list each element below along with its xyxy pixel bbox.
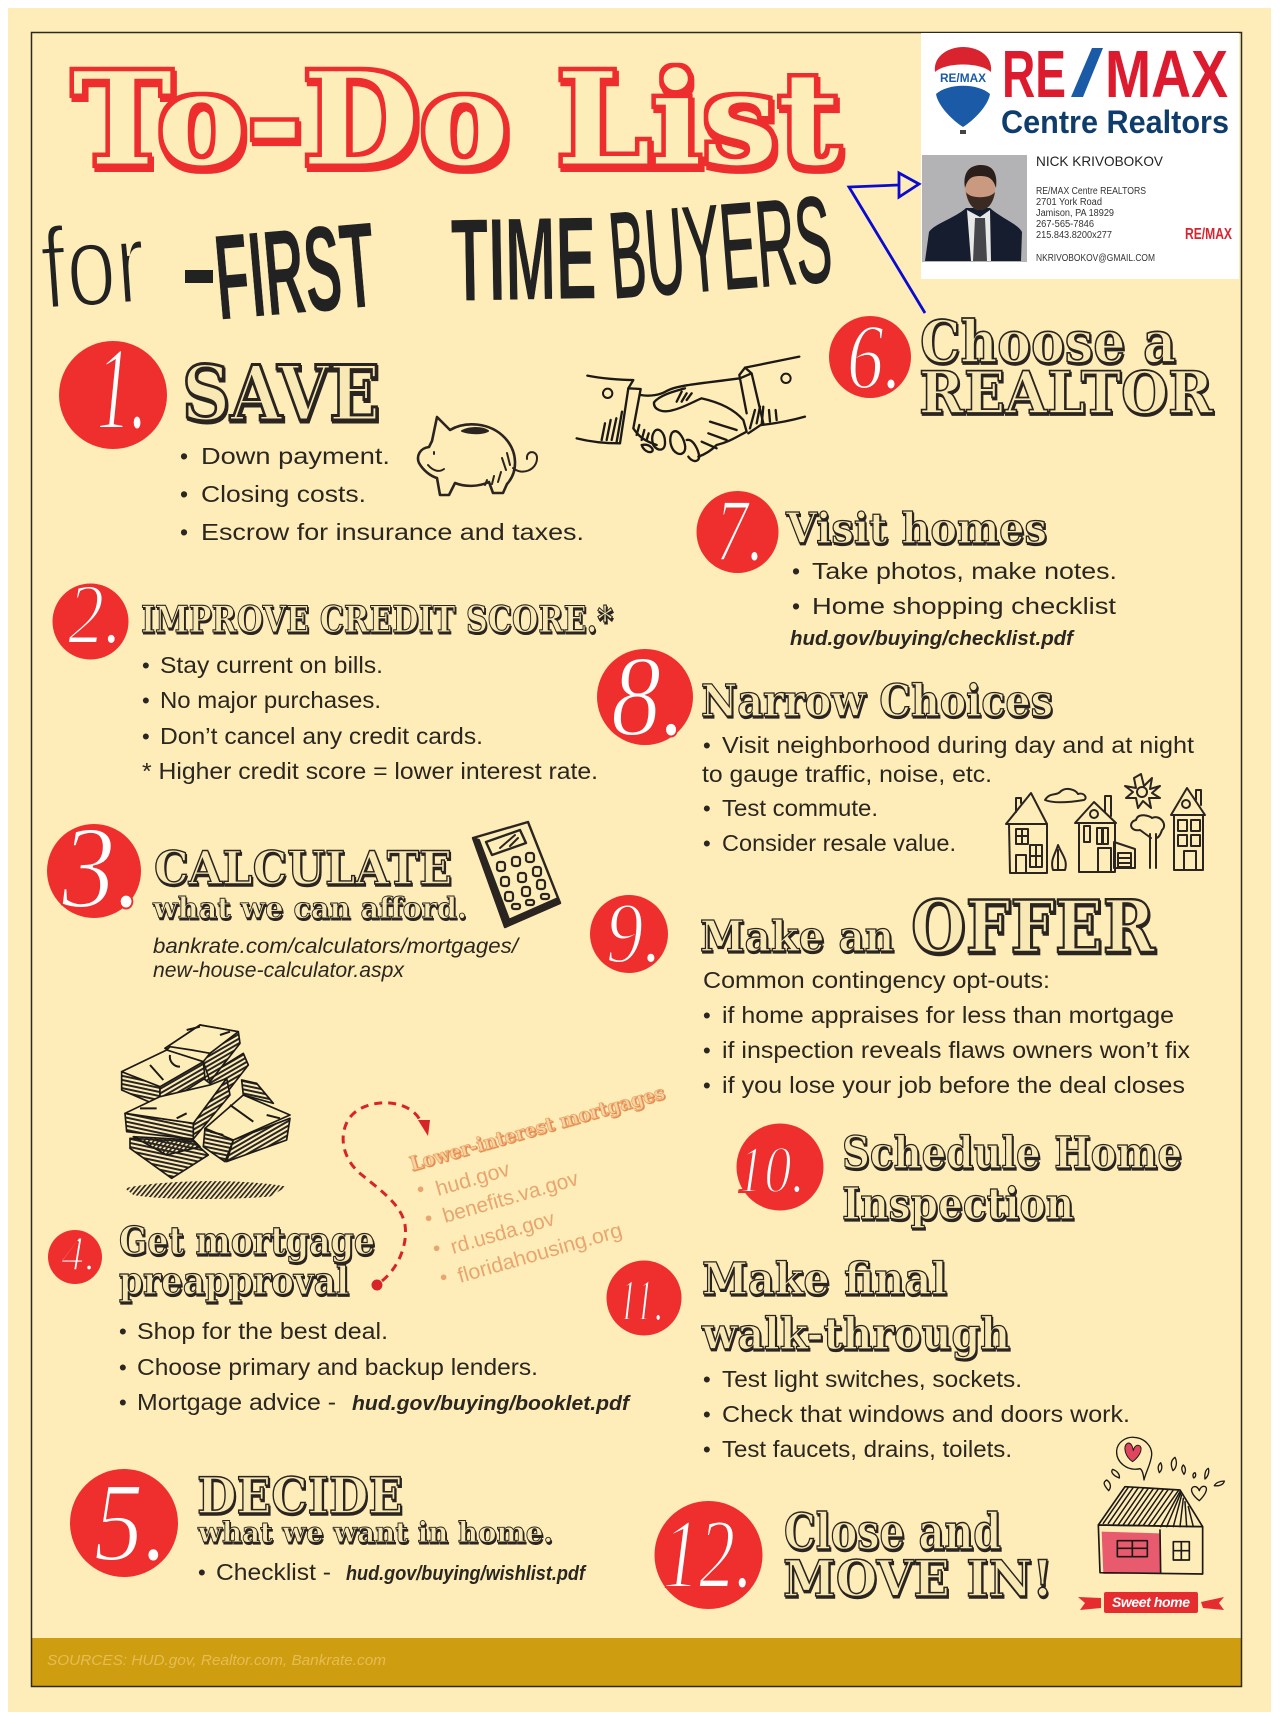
step 11 number bbox=[606, 1260, 682, 1336]
step 1 bullets: Escrow for insurance and taxes. bbox=[201, 519, 584, 545]
step 3 link: bankrate.com/calculators/mortgages/ bbox=[153, 935, 520, 958]
step 5 checklist: Checklist - bbox=[216, 1559, 331, 1585]
step 4 bullets: • bbox=[119, 1319, 127, 1344]
step 5 heading: DECIDE bbox=[197, 1466, 403, 1525]
step 7 bullets: Home shopping checklist bbox=[812, 593, 1117, 619]
step 7 bullets: hud.gov/buying/checklist.pdf bbox=[790, 628, 1075, 650]
step 6 number: 6. bbox=[847, 306, 902, 409]
footer band: SOURCES: HUD.gov, Realtor.com, Bankrate.com bbox=[47, 1652, 386, 1669]
step 9 bullets: • bbox=[703, 1038, 711, 1063]
step 4 aside: lower-interest mortgages: hud.gov bbox=[433, 1158, 513, 1201]
step 11 heading: walk-through bbox=[701, 1309, 1010, 1360]
icon: calculator bbox=[473, 822, 560, 927]
footer band bbox=[32, 1638, 1242, 1686]
step 2 bullets: • bbox=[142, 724, 150, 749]
step 11 bullets: Test light switches, sockets. bbox=[722, 1366, 1022, 1392]
step 3 subheading: what we can afford. bbox=[152, 891, 467, 925]
step 8 bullets: • bbox=[703, 831, 711, 856]
step 1 number bbox=[59, 323, 167, 454]
step 3 link bbox=[153, 935, 520, 982]
title: To-Do List bbox=[72, 45, 840, 195]
step 11 bullets: Check that windows and doors work. bbox=[722, 1401, 1130, 1427]
step 4 aside: lower-interest mortgages: • bbox=[437, 1266, 450, 1290]
step 5 checklist: • bbox=[198, 1560, 206, 1585]
icon: money stacks bbox=[122, 1025, 290, 1199]
step 11 bullets: Test faucets, drains, toilets. bbox=[722, 1436, 1012, 1462]
step 2 bullets: * Higher credit score = lower interest rate. bbox=[142, 758, 598, 784]
agent contact details: 267-565-7846 bbox=[1036, 219, 1094, 230]
step 2 bullets: Don’t cancel any credit cards. bbox=[160, 723, 483, 749]
step 8 bullets: • bbox=[703, 733, 711, 758]
icon: balloon logo: RE/MAX bbox=[940, 71, 986, 85]
step 3 link: new-house-calculator.aspx bbox=[153, 959, 405, 982]
step 5 number: 5. bbox=[94, 1461, 168, 1585]
logo wordmark: Centre Realtors bbox=[1001, 104, 1229, 140]
step 9 bullets: • bbox=[703, 1073, 711, 1098]
step 1 bullets bbox=[180, 443, 584, 545]
agent contact details: Jamison, PA 18929 bbox=[1036, 208, 1114, 219]
step 1 bullets: • bbox=[180, 481, 188, 507]
step 1 number: 1. bbox=[97, 323, 147, 454]
step 5 subheading: what we want in home. bbox=[197, 1516, 553, 1549]
step 4 bullets bbox=[119, 1318, 631, 1415]
step 8 number: 8. bbox=[611, 633, 686, 760]
step 1 heading: SAVE bbox=[182, 349, 380, 438]
step 11 bullets: • bbox=[703, 1367, 711, 1392]
step 12 heading: Close and bbox=[784, 1502, 1001, 1561]
agent contact details: 2701 York Road bbox=[1036, 197, 1102, 208]
step 12 heading: MOVE IN! bbox=[783, 1549, 1053, 1608]
agent contact details: NICK KRIVOBOKOV bbox=[1036, 153, 1164, 169]
step 9 bullets bbox=[703, 967, 1191, 1098]
logo wordmark: MAX bbox=[1105, 37, 1228, 112]
icon: houses bbox=[1006, 774, 1205, 873]
step 8 bullets: Consider resale value. bbox=[722, 830, 956, 856]
step 4 aside: lower-interest mortgages: rd.usda.gov bbox=[448, 1207, 558, 1259]
step 12 heading bbox=[783, 1502, 1053, 1608]
step 9 number: 9. bbox=[606, 884, 662, 981]
step 2 bullets: No major purchases. bbox=[160, 687, 381, 713]
step 12 number: 12. bbox=[663, 1500, 753, 1609]
step 6 heading: Choose a bbox=[920, 308, 1176, 376]
step 9 heading: OFFER bbox=[911, 884, 1156, 969]
agent contact details: RE/MAX bbox=[1185, 226, 1232, 243]
text: BUYERS bbox=[604, 171, 836, 324]
agent photo bbox=[922, 155, 1027, 262]
step 4 aside: lower-interest mortgages: Lower-interest mortgages bbox=[407, 1080, 667, 1176]
subtitle: TIME bbox=[450, 192, 597, 327]
step 2 bullets: • bbox=[142, 688, 150, 713]
logo wordmark bbox=[1001, 37, 1229, 140]
step 4 bullets: hud.gov/buying/booklet.pdf bbox=[352, 1393, 631, 1415]
step 3 number: 3. bbox=[61, 802, 142, 933]
step 10 heading bbox=[842, 1128, 1182, 1230]
step 9 bullets: if home appraises for less than mortgage bbox=[722, 1002, 1174, 1028]
step 4 number: 4. bbox=[61, 1225, 96, 1281]
icon: handshake bbox=[577, 357, 805, 461]
ribbon: sweet home: Sweet home bbox=[1112, 1594, 1190, 1610]
agent contact details: NKRIVOBOKOV@GMAIL.COM bbox=[1036, 253, 1155, 264]
subtitle: FIRST bbox=[209, 196, 381, 346]
step 2 heading: IMPROVE CREDIT SCORE.* bbox=[141, 599, 613, 641]
ribbon: sweet home bbox=[1078, 1592, 1224, 1613]
step 5 checklist bbox=[198, 1559, 587, 1585]
step 8 bullets: to gauge traffic, noise, etc. bbox=[702, 761, 992, 787]
step 10 heading: Schedule Home bbox=[842, 1128, 1182, 1179]
step 4 number bbox=[48, 1225, 102, 1284]
step 7 bullets: Take photos, make notes. bbox=[812, 558, 1117, 584]
step 4 aside: lower-interest mortgages: • bbox=[430, 1237, 443, 1261]
step 4 bullets: Shop for the best deal. bbox=[137, 1318, 388, 1344]
step 9 bullets: if inspection reveals flaws owners won’t fix bbox=[722, 1037, 1191, 1063]
step 4 bullets: • bbox=[119, 1390, 127, 1415]
step 1 bullets: Down payment. bbox=[201, 443, 390, 469]
step 2 bullets bbox=[142, 652, 598, 784]
step 8 bullets: Visit neighborhood during day and at night bbox=[722, 732, 1195, 758]
step 11 bullets bbox=[703, 1366, 1130, 1462]
step 6 heading bbox=[919, 308, 1214, 427]
step 9 heading bbox=[700, 884, 1156, 969]
icon: sweet home house bbox=[1098, 1437, 1224, 1574]
agent card bbox=[921, 33, 1239, 279]
step 1 bullets: • bbox=[180, 443, 188, 469]
logo wordmark: RE bbox=[1002, 37, 1066, 112]
step 9 bullets: Common contingency opt-outs: bbox=[703, 967, 1050, 993]
step 7 heading: Visit homes bbox=[785, 504, 1047, 553]
step 4 bullets: Choose primary and backup lenders. bbox=[137, 1354, 538, 1380]
step 3 heading: CALCULATE bbox=[154, 841, 452, 895]
step 7 bullets: • bbox=[792, 558, 800, 584]
step 4 bullets: Mortgage advice - bbox=[137, 1389, 336, 1415]
agent contact details: 215.843.8200x277 bbox=[1036, 230, 1112, 241]
step 4 aside: lower-interest mortgages: benefits.va.gov bbox=[440, 1167, 581, 1228]
arrow: dashed path to mortgages bbox=[343, 1103, 430, 1290]
step 8 bullets bbox=[702, 732, 1195, 856]
agent contact details: RE/MAX Centre REALTORS bbox=[1036, 186, 1146, 197]
step 11 heading: Make final bbox=[702, 1254, 947, 1305]
step 10 number: 10. bbox=[737, 1133, 805, 1207]
step 11 bullets: • bbox=[703, 1437, 711, 1462]
step 4 heading: preapproval bbox=[119, 1258, 349, 1303]
step 4 heading: Get mortgage bbox=[119, 1218, 375, 1263]
step 2 number: 2. bbox=[68, 566, 122, 662]
subtitle bbox=[37, 171, 836, 346]
step 4 heading bbox=[119, 1218, 375, 1303]
step 4 aside: lower-interest mortgages: • bbox=[414, 1178, 427, 1202]
step 1 bullets: Closing costs. bbox=[201, 481, 366, 507]
step 2 bullets: Stay current on bills. bbox=[160, 652, 383, 678]
step 6 heading: REALTOR bbox=[919, 359, 1214, 427]
step 2 bullets: • bbox=[142, 653, 150, 678]
icon: piggy bank bbox=[418, 417, 537, 495]
step 7 bullets: • bbox=[792, 593, 800, 619]
step 1 bullets: • bbox=[180, 519, 188, 545]
step 8 heading: Narrow Choices bbox=[701, 676, 1053, 727]
step 4 aside: lower-interest mortgages: floridahousing.org bbox=[455, 1219, 625, 1288]
step 4 aside: lower-interest mortgages bbox=[407, 1080, 667, 1290]
step 11 bullets: • bbox=[703, 1402, 711, 1427]
step 8 bullets: Test commute. bbox=[722, 795, 878, 821]
arrow: blue pointers to card and realtor bbox=[849, 173, 925, 313]
step 9 bullets: • bbox=[703, 1003, 711, 1028]
step 11 number: 11. bbox=[618, 1267, 664, 1333]
step 4 bullets: • bbox=[119, 1355, 127, 1380]
step 9 heading: Make an bbox=[700, 912, 894, 961]
step 5 checklist: hud.gov/buying/wishlist.pdf bbox=[346, 1563, 587, 1585]
step 11 heading bbox=[701, 1254, 1010, 1360]
icon: balloon logo bbox=[935, 47, 991, 134]
step 7 number: 7. bbox=[716, 482, 764, 580]
step 10 heading: Inspection bbox=[842, 1179, 1074, 1230]
step 4 aside: lower-interest mortgages: • bbox=[422, 1207, 435, 1231]
agent contact details bbox=[1036, 153, 1232, 264]
step 8 bullets: • bbox=[703, 796, 711, 821]
subtitle: for bbox=[37, 197, 149, 334]
step 9 bullets: if you lose your job before the deal closes bbox=[722, 1072, 1185, 1098]
step 7 bullets bbox=[790, 558, 1117, 650]
